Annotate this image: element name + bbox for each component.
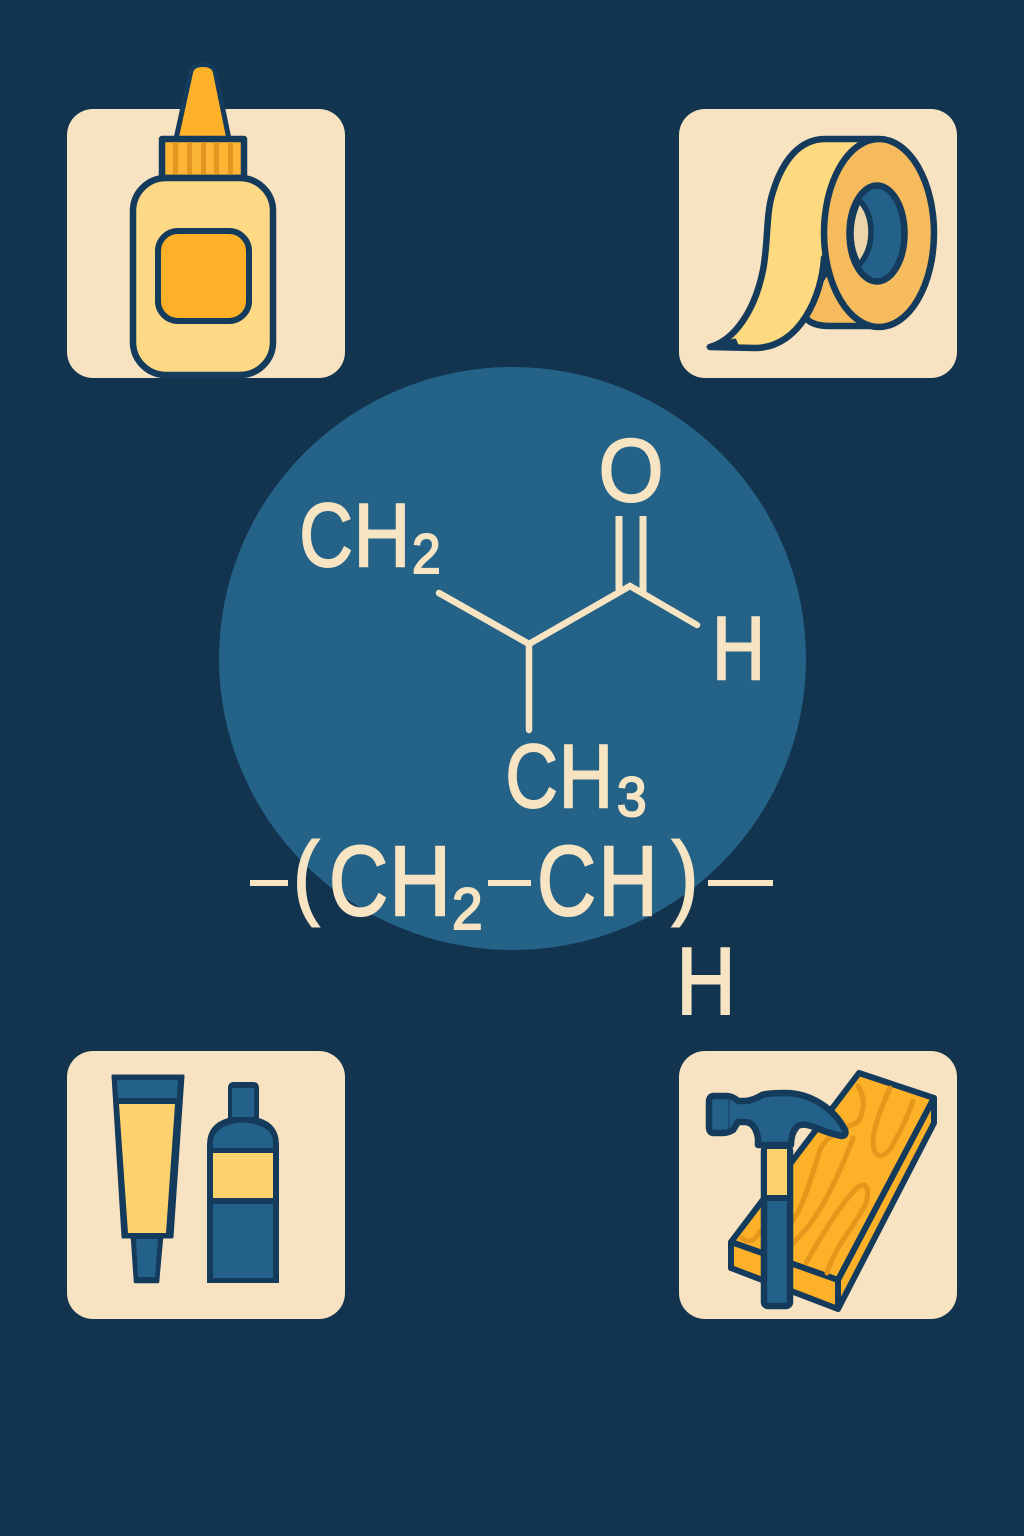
icon: hammer [709,1093,846,1306]
icon: adhesive bottle [207,1082,279,1283]
central circle [219,367,806,950]
icon: wood plank [731,1073,934,1309]
card: glue bottle [67,67,345,378]
polymer chain formula [250,824,773,941]
label: CH2: 2 [412,523,441,585]
icon: glue bottle [133,67,273,375]
label: CH2: H [354,484,410,585]
label: CH3: C [505,727,558,827]
polymer chain formula: H [389,825,451,936]
label: O: O [598,422,664,521]
card: tube and bottle [67,1051,345,1319]
polymer chain formula: H [598,827,658,937]
label: CH3: H [559,726,613,827]
label: pendant H: H [676,927,736,1034]
label: H: H [712,599,765,699]
icon: tape roll [708,139,934,348]
polymer chain formula: ( [293,824,320,927]
card: tape roll [679,109,957,378]
polymer chain formula: C [329,827,388,937]
polymer chain formula: ) [672,824,698,927]
label: CH3 [505,726,647,828]
label: CH2 [299,484,441,586]
icon: adhesive tube [113,1076,183,1282]
chemical structure: bonds [439,516,697,730]
polymer chain formula: C [537,827,596,937]
label: CH2: C [299,485,353,586]
card: hammer and wood [679,1051,957,1319]
label: CH3: 3 [617,766,647,828]
polymer chain formula: 2 [452,877,483,941]
